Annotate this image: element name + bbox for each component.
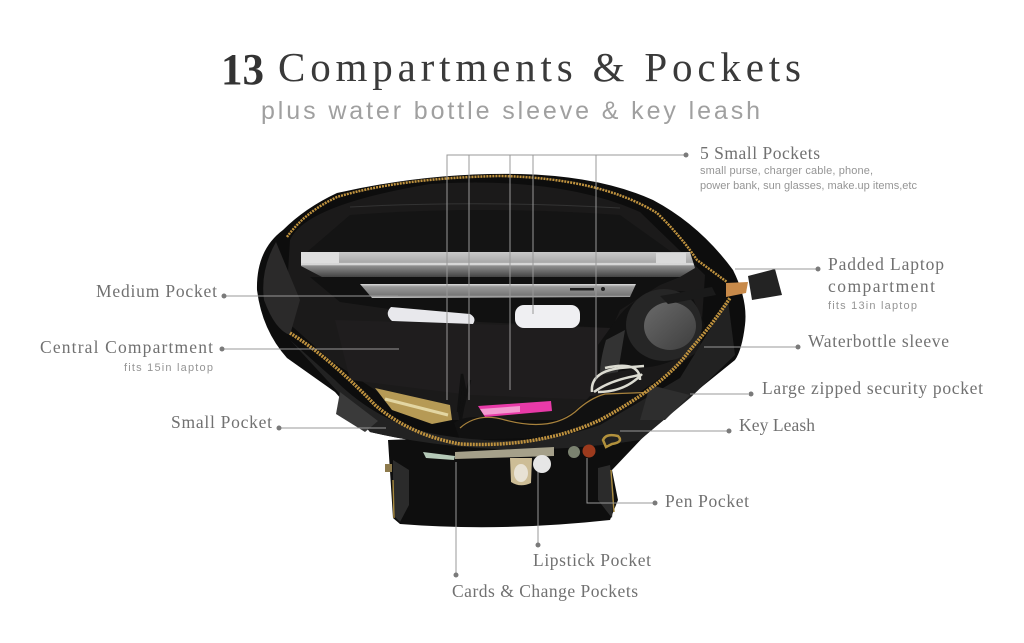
tablet [360, 284, 636, 298]
callout: 5 small pockets [447, 143, 918, 400]
pocket contents: pens [568, 446, 580, 458]
laptop [301, 252, 695, 277]
callout: medium pocket [96, 281, 398, 301]
callout: 5 small pockets: small purse, charger cable, phone, [700, 165, 873, 177]
callout: lipstick pocket [533, 472, 651, 570]
bag illustration [257, 174, 782, 527]
lower zipper [290, 298, 730, 444]
callout: padded laptop compartment: Padded Laptop [828, 254, 944, 274]
callout: central compartment [40, 337, 399, 374]
gold pouch [375, 388, 452, 424]
central compartment [335, 320, 610, 400]
callout: pen pocket [587, 458, 749, 511]
callout: waterbottle sleeve [704, 331, 949, 351]
pocket contents: cards [423, 452, 455, 460]
key ring [603, 435, 620, 447]
key leash strap [458, 374, 470, 424]
bag outer shell [257, 174, 746, 449]
callout: central compartment: Central Compartment [40, 337, 213, 357]
callout: cards and change pockets: Cards & Change Pockets [452, 581, 638, 601]
callout: large zipped security pocket: Large zipped security pocket [762, 378, 983, 398]
callout: key leash [620, 415, 815, 435]
callout: central compartment: fits 15in laptop [124, 362, 213, 374]
callout: 5 small pockets: 5 Small Pockets [700, 143, 820, 163]
zipper pull tab [660, 269, 782, 304]
subtitle: plus water bottle sleeve & key leash [261, 97, 760, 125]
callout: pen pocket: Pen Pocket [665, 491, 749, 511]
title: 13 [221, 45, 264, 94]
bag front flap [388, 430, 650, 527]
bag front wall [290, 300, 735, 449]
callout: lipstick pocket: Lipstick Pocket [533, 550, 651, 570]
upper zipper [287, 176, 727, 282]
pocket divider [310, 277, 680, 328]
bag interior lining [285, 183, 705, 420]
callout: padded laptop compartment [735, 254, 944, 312]
callout: small pocket: Small Pocket [171, 412, 272, 432]
pink notebook [478, 401, 552, 417]
title: Compartments & Pockets [278, 44, 801, 90]
phone in pocket [388, 307, 474, 324]
callout: medium pocket: Medium Pocket [96, 281, 217, 301]
callout: 5 small pockets: power bank, sun glasses, make.up items,etc [700, 180, 918, 192]
side buckle [385, 464, 392, 472]
water bottle [598, 289, 705, 375]
pocket contents: lipstick [510, 458, 532, 485]
callout: waterbottle sleeve: Waterbottle sleeve [808, 331, 949, 351]
callout: key leash: Key Leash [739, 415, 815, 435]
leader lines and labels [40, 143, 983, 601]
white power bank [515, 305, 580, 328]
callout: padded laptop compartment: fits 13in laptop [828, 300, 917, 312]
lower zip pockets [454, 390, 690, 440]
callout: small pocket [171, 412, 386, 432]
callout: cards and change pockets [452, 462, 638, 601]
callout: padded laptop compartment: compartment [828, 276, 935, 296]
charger cable [592, 366, 644, 392]
